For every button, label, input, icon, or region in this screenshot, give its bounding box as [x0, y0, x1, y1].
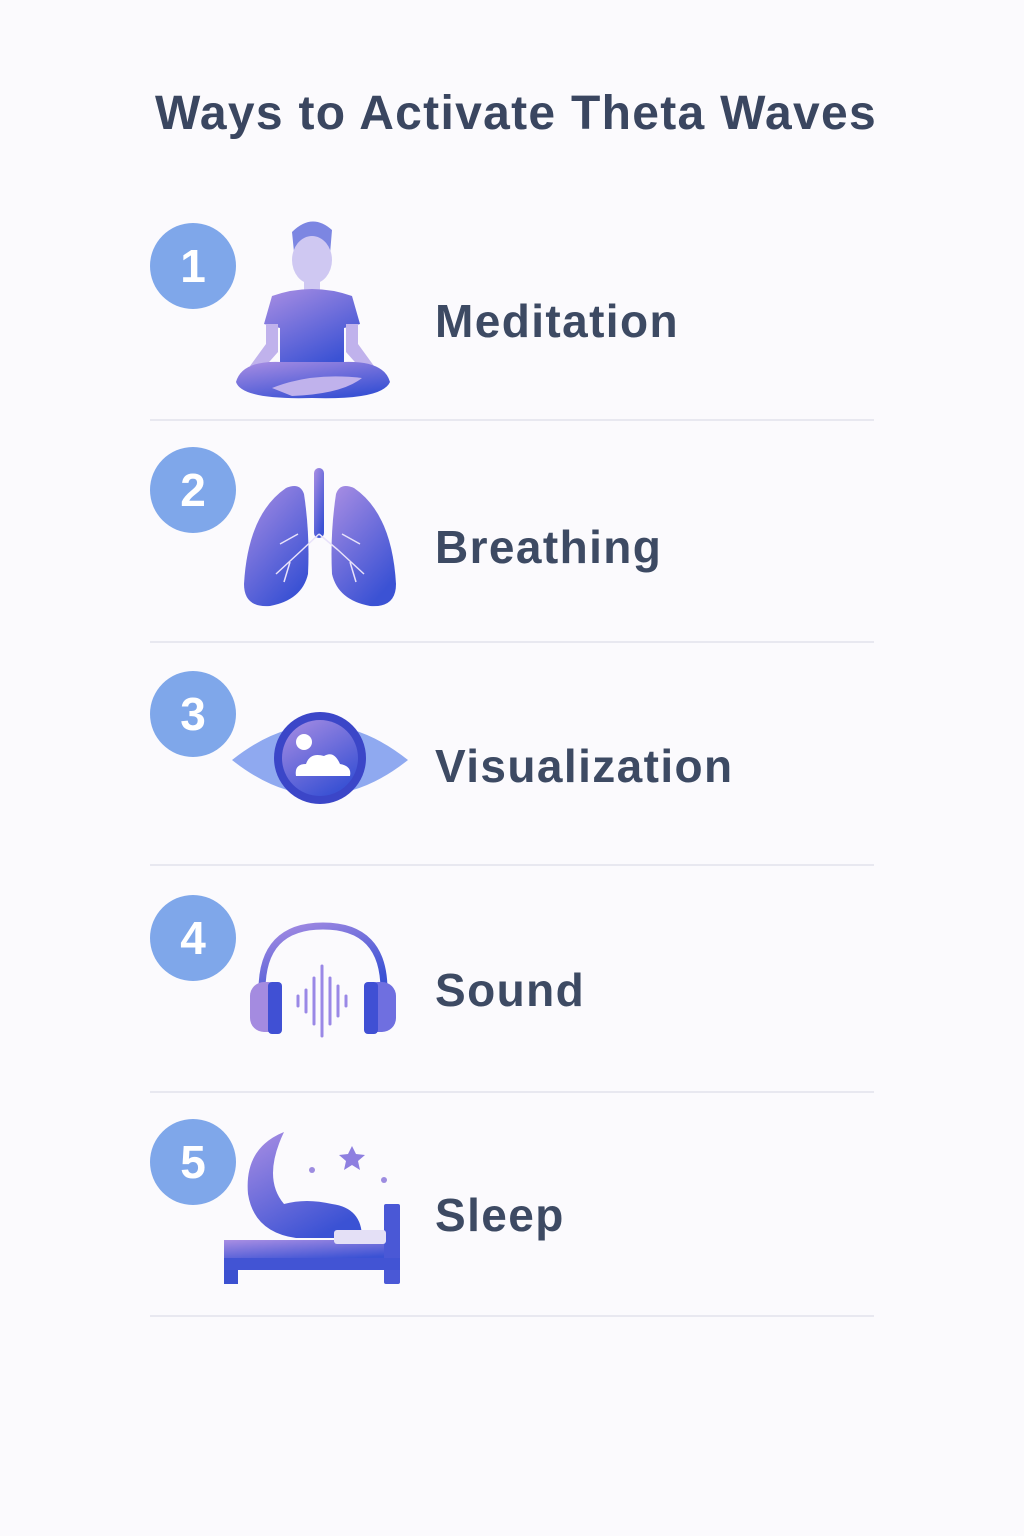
- item 4: sound: [150, 895, 585, 1038]
- icon: eye with cloud: [232, 712, 408, 804]
- icon: moon and bed: [224, 1132, 400, 1284]
- icon: headphones: [250, 922, 396, 1038]
- number badge 1: [150, 223, 236, 309]
- item 2: breathing: [150, 447, 662, 606]
- number badge 2: 2: [180, 464, 206, 516]
- label: Sleep: Sleep: [435, 1189, 565, 1241]
- number badge 4: [150, 895, 236, 981]
- icon: lungs: [244, 468, 396, 606]
- number badge 3: [150, 671, 236, 757]
- number badge 3: 3: [180, 688, 206, 740]
- number badge 1: 1: [180, 240, 206, 292]
- icon: meditating person: [236, 222, 390, 398]
- label: Sound: Sound: [435, 964, 585, 1016]
- item 5: sleep: [150, 1119, 565, 1284]
- item 3: visualization: [150, 671, 734, 804]
- number badge 4: 4: [180, 912, 206, 964]
- item 1: meditation: [150, 222, 679, 398]
- label: Meditation: Meditation: [435, 295, 679, 347]
- number badge 2: [150, 447, 236, 533]
- title: Ways to Activate Theta Waves: [155, 87, 877, 140]
- label: Visualization: Visualization: [435, 740, 734, 792]
- label: Breathing: Breathing: [435, 521, 662, 573]
- number badge 5: [150, 1119, 236, 1205]
- number badge 5: 5: [180, 1136, 206, 1188]
